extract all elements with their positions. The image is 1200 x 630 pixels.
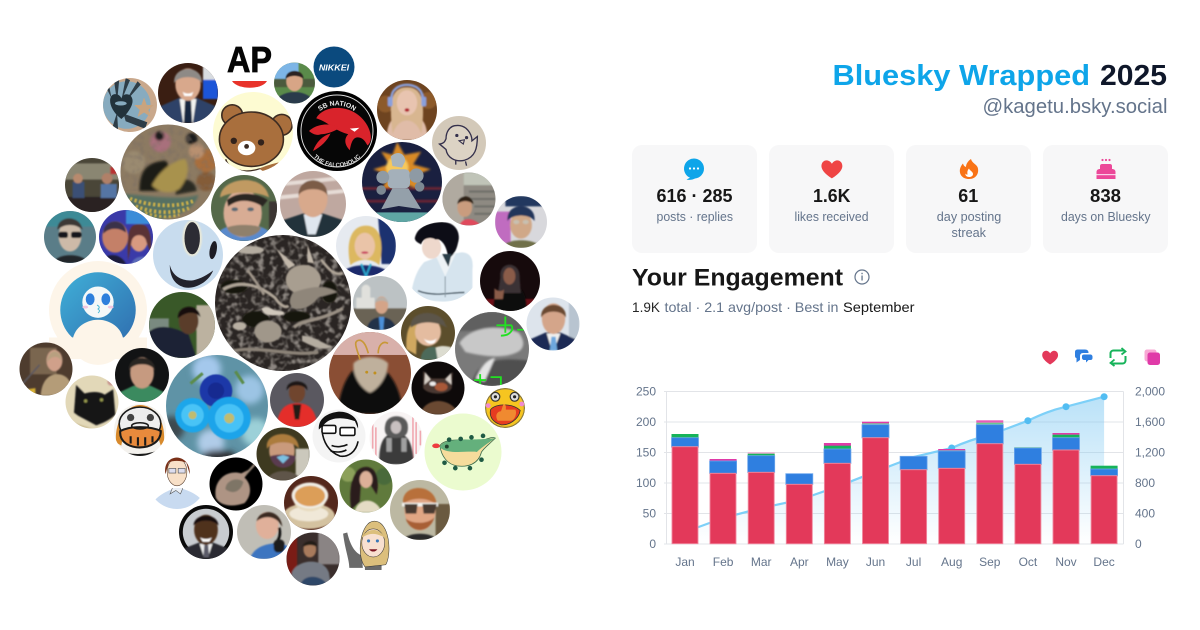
panel: days on Bluesky [1043, 145, 1168, 253]
avatar: SB Nation Falcoholic badge: THE FALCOHOLIC [314, 154, 360, 166]
avatar: heart and star emblem [103, 78, 157, 132]
avatar: man outdoors [274, 62, 315, 104]
stat value: 1.6K [813, 186, 850, 206]
bar: Oct [1014, 447, 1041, 544]
left axis labels: 50 [643, 506, 656, 520]
icon: speech bubble [684, 159, 704, 180]
avatar: cap woman with braid [401, 306, 455, 360]
left axis labels: 250 [636, 384, 656, 398]
month labels: Jul [906, 555, 921, 569]
stat label: streak [952, 225, 986, 240]
stat value: 838 [1090, 186, 1121, 206]
bar: Dec [1091, 466, 1118, 544]
avatar: daruma doll [114, 404, 166, 456]
avatar: man in cap [211, 175, 278, 241]
bar: Apr [786, 474, 813, 544]
avatar: armored robot wrestler [362, 142, 442, 222]
stat value: 616 · 285 [656, 186, 732, 206]
avatar: two men at broadcast desk [65, 158, 119, 213]
stat label: day posting [937, 209, 1001, 224]
avatar: man with sunglasses [44, 211, 96, 263]
engagement chart [636, 384, 1165, 569]
bar: Jan [672, 434, 698, 544]
avatar: woman with long dark hair [340, 460, 392, 512]
bar: Sep [976, 420, 1003, 544]
grid [664, 392, 1124, 544]
avatar: man in mask with curly hair [256, 428, 310, 480]
month labels: Feb [713, 555, 734, 569]
icon: replies [1075, 350, 1092, 362]
title: Bluesky Wrapped [832, 60, 1090, 92]
avatar: green creature [424, 414, 502, 490]
avatar: man leaning over table [149, 292, 216, 358]
cumulative line [685, 393, 1108, 532]
avatar: man in suit smiling [179, 505, 233, 559]
stacked bars [672, 420, 1118, 544]
bar: May [824, 443, 851, 544]
avatar: brown bear character [213, 92, 293, 180]
avatar: white-haired character on blue [49, 261, 147, 365]
avatar: man with glasses and cap [495, 196, 547, 248]
avatar: cartoon man with glasses [156, 458, 200, 509]
stat label: days on Bluesky [1061, 209, 1151, 224]
engagement summary: total · 2.1 avg/post · Best in [664, 299, 838, 315]
avatar: dragon engraving [215, 235, 351, 371]
avatar: SB Nation Falcoholic badge: SB NATION [318, 100, 356, 111]
bar: Feb [710, 459, 737, 544]
avatar: black-and-white sleeper with green marks [455, 312, 529, 386]
right axis labels: 1,200 [1135, 446, 1165, 460]
month labels: May [826, 555, 849, 569]
engagement summary: September [843, 299, 915, 315]
avatar: selfie couple [99, 210, 153, 264]
icon: quotes [1144, 350, 1160, 365]
month labels: Dec [1093, 555, 1115, 569]
month labels: Jan [675, 555, 695, 569]
month labels [675, 555, 1115, 569]
icon: flame [960, 159, 978, 179]
cumulative area [685, 397, 1104, 544]
avatar: black cat [66, 376, 118, 428]
avatar: blue flowers [166, 355, 268, 457]
right axis labels: 2,000 [1135, 384, 1165, 398]
avatar: bald man in suit [280, 171, 346, 237]
heading: your engagement: Your Engagement [632, 264, 843, 292]
bar: Nov [1052, 433, 1080, 544]
avatar: man in navy suit [158, 63, 218, 123]
month labels: Nov [1055, 555, 1077, 569]
avatar: woman in dark dress [480, 251, 540, 311]
left axis labels: 200 [636, 415, 656, 429]
right axis labels: 400 [1135, 506, 1155, 520]
engagement summary: 1.9K [632, 299, 661, 315]
panel: likes received [769, 145, 894, 253]
avatar: man on stairs [442, 172, 496, 226]
avatar: Nikkei logo: NIKKEI [319, 62, 350, 72]
bar: Mar [748, 452, 775, 544]
stat label: likes received [794, 209, 868, 224]
title: 2025 [1100, 60, 1167, 92]
panel: day posting streak [906, 145, 1031, 253]
avatar: chick sketch [432, 116, 486, 170]
bar: Jul [900, 456, 927, 544]
engagement summary [632, 299, 915, 315]
right axis labels: 800 [1135, 476, 1155, 490]
left axis labels [636, 384, 656, 551]
icon: heart [821, 160, 842, 178]
avatar cluster [20, 39, 580, 586]
icon: reposts [1110, 348, 1126, 366]
avatar: blonde bitmoji [343, 521, 389, 570]
avatar: man at Capitol [353, 276, 407, 330]
avatar: blonde woman in navy [336, 216, 396, 276]
bar: Aug [938, 449, 965, 544]
avatar: tea cup [283, 476, 338, 530]
stat label: posts · replies [656, 209, 733, 224]
icon: likes [1042, 351, 1058, 364]
right axis labels: 0 [1135, 537, 1142, 551]
avatar: man in gray sweater seated [286, 532, 340, 586]
avatar: giant mouse plush [153, 220, 223, 290]
avatar: moray eel [120, 124, 217, 220]
left axis labels: 0 [649, 537, 656, 551]
icon: info [855, 270, 869, 284]
month labels: Apr [790, 555, 809, 569]
avatar: AP logo: AP [227, 39, 272, 80]
avatar: long-horned insect [329, 332, 411, 414]
avatar: man in green shirt [115, 348, 169, 402]
avatar: red panda [412, 362, 464, 414]
avatar: old man at podium [20, 342, 73, 396]
avatar: SB Nation Falcoholic badge [297, 91, 377, 171]
month labels: Sep [979, 555, 1001, 569]
icon: birthday cake [1096, 159, 1116, 179]
right axis labels [1135, 384, 1165, 551]
avatar: anime character with black hair [412, 222, 473, 302]
left axis labels: 100 [636, 476, 656, 490]
right axis labels: 1,600 [1135, 415, 1165, 429]
stat value: 61 [958, 186, 978, 206]
stat label [937, 209, 1001, 240]
left axis labels: 150 [636, 446, 656, 460]
avatar: hooded gray character [370, 412, 422, 464]
avatar: man in blue shirt with headset [237, 505, 291, 559]
avatar: suit man with blue tie [526, 298, 580, 350]
month labels: Jun [866, 555, 885, 569]
avatar: blonde woman with headphones [377, 80, 437, 140]
handle: @kagetu.bsky.social [982, 96, 1168, 118]
bar: Jun [862, 422, 889, 544]
panel: posts and replies [632, 145, 757, 253]
avatar: red-bearded man in white sunglasses [390, 480, 450, 540]
month labels: Oct [1019, 555, 1038, 569]
month labels: Aug [941, 555, 962, 569]
avatar: thumbs-up yellow face [485, 388, 525, 428]
avatar: woman in red jacket [270, 373, 324, 427]
avatar: horseshoe crab [210, 458, 262, 510]
month labels: Mar [751, 555, 772, 569]
avatar: bespectacled sketch portrait [312, 410, 366, 462]
avatar: Nikkei logo [314, 46, 354, 88]
chart legend [1042, 348, 1160, 366]
